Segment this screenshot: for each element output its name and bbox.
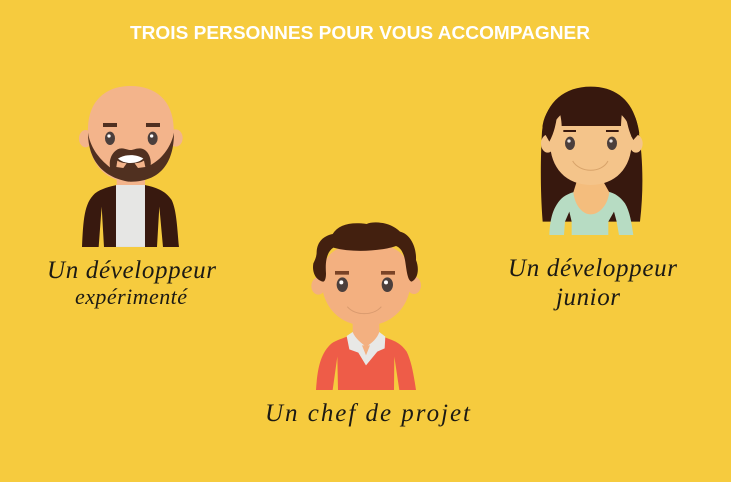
eyes (565, 137, 617, 150)
smile (347, 307, 381, 314)
neck (353, 320, 379, 347)
hair (313, 222, 418, 282)
body: jacket and shirt (82, 178, 179, 247)
label: junior developer: Un développeur (508, 255, 677, 282)
collar (347, 332, 385, 365)
character: junior developer (541, 87, 643, 235)
label: junior developer (508, 255, 677, 311)
skin patches below the moustache (116, 161, 145, 168)
neck and neckline (573, 182, 609, 214)
character: experienced developer (79, 86, 183, 247)
eyes (105, 132, 158, 145)
head (550, 105, 632, 185)
beard (88, 133, 174, 182)
eyebrows (335, 271, 395, 275)
sweater (316, 336, 416, 390)
smile (573, 161, 608, 170)
label: experienced developer: expérimenté (75, 284, 188, 309)
head (322, 243, 411, 326)
label: project manager: Un chef de projet (265, 400, 471, 427)
eyes (337, 277, 393, 292)
character: project manager (311, 222, 421, 390)
ears (541, 135, 643, 153)
fringe and side hair (542, 87, 639, 142)
ears (79, 129, 183, 147)
title: TROIS PERSONNES POUR VOUS ACCOMPAGNER (130, 22, 590, 43)
ears (311, 277, 421, 295)
top (549, 192, 633, 235)
back hair (541, 87, 642, 222)
label: experienced developer (47, 257, 216, 309)
eyebrows (563, 130, 619, 132)
head (88, 86, 174, 182)
mouth (118, 155, 143, 163)
eyebrows (103, 123, 160, 127)
label: experienced developer: Un développeur (47, 257, 216, 284)
label: junior developer: junior (553, 284, 620, 311)
